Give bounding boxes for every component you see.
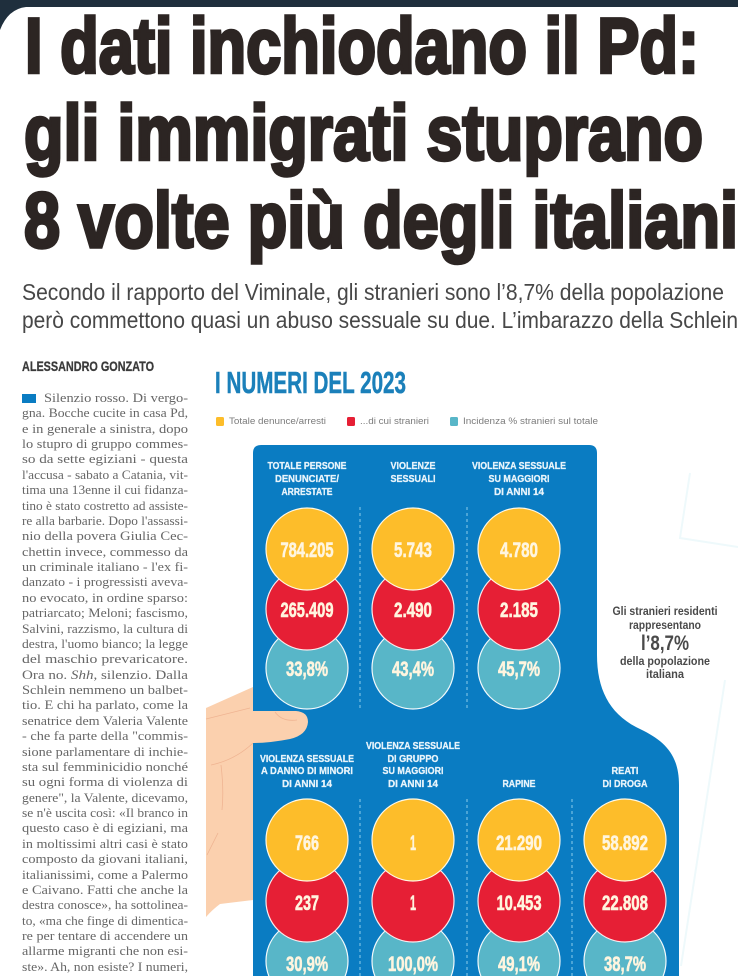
article text: Ora no. Shh , silenzio. Dalla xyxy=(22,668,189,682)
callout: stranieri residenti: italiana xyxy=(646,669,685,681)
column: reati di droga xyxy=(584,766,666,976)
column: totale persone: TOTALE PERSONE xyxy=(268,461,347,472)
article text: composto da giovani italiani, xyxy=(22,852,188,866)
article text: Silenzio rosso. Di vergo- xyxy=(44,391,188,405)
column: violenze sessuali: VIOLENZE xyxy=(390,461,436,472)
article text: su ogni forma di violenza di xyxy=(22,775,189,789)
column: totale persone xyxy=(266,461,348,709)
column: violenze sessuali: SESSUALI xyxy=(390,474,436,485)
article text: patriarcato; Meloni; fascismo, xyxy=(22,606,188,620)
article text: - che fa parte della "commis- xyxy=(22,729,188,743)
article text: del maschio prevaricatore. xyxy=(22,652,188,666)
column dividers xyxy=(360,507,572,976)
article text: re per tentare di accendere un xyxy=(22,929,188,943)
article text: Salvini, razzismo, la cultura di xyxy=(22,622,189,636)
article text: lo stupro di gruppo commes- xyxy=(22,437,188,451)
article text: se n'è uscita così: «Il branco in xyxy=(22,806,188,820)
article text: re alla barbarie. Dopo l'assassi- xyxy=(22,514,188,528)
column: violenza sessuale a danno di minori: DI ANNI 14 xyxy=(282,779,332,790)
column: rapine: RAPINE xyxy=(502,779,536,790)
article text: Schlein nemmeno un balbet- xyxy=(22,683,188,697)
column: violenze sessuali: 5.743 xyxy=(394,539,432,562)
column: violenza sessuale a danno di minori: 30,9% xyxy=(286,953,328,976)
column: rapine xyxy=(478,779,560,976)
column: violenza sessuale a danno di minori: 766 xyxy=(295,832,319,855)
article text: gna. Bocche cucite in casa Pd, xyxy=(22,406,188,420)
callout: stranieri residenti: Gli stranieri residenti xyxy=(612,606,718,618)
column: reati di droga: 58.892 xyxy=(602,832,648,855)
column: violenza sessuale su maggiori: DI ANNI 14 xyxy=(494,487,544,498)
column: violenza sessuale di gruppo: DI GRUPPO xyxy=(388,754,439,765)
legend: Totale denunce/arresti xyxy=(229,416,326,426)
column: violenza sessuale di gruppo xyxy=(366,741,460,976)
column: rapine: 49,1% xyxy=(498,953,540,976)
article text: chettin invece, commesso da xyxy=(22,545,189,559)
article text: ste». Ah, non esiste? I numeri, xyxy=(22,960,188,974)
article text: l'accusa - sabato a Catania, vit- xyxy=(22,468,188,482)
article text: un criminale italiano - l'ex fi- xyxy=(22,560,188,574)
article text: no evocato, in ordine sparso: xyxy=(22,591,188,605)
column: violenza sessuale a danno di minori: VIOLENZA SESSUALE xyxy=(260,754,354,765)
callout: stranieri residenti: rappresentano xyxy=(629,620,701,632)
column: violenza sessuale su maggiori: SU MAGGIORI xyxy=(488,474,550,485)
column: violenza sessuale su maggiori xyxy=(472,461,566,709)
column: violenza sessuale di gruppo: VIOLENZA SESSUALE xyxy=(366,741,460,752)
column: totale persone: ARRESTATE xyxy=(282,487,333,498)
column: violenza sessuale a danno di minori: 237 xyxy=(295,892,319,915)
column: violenza sessuale su maggiori: 45,7% xyxy=(498,658,540,681)
article text: genere", la Valente, dicevamo, xyxy=(22,791,188,805)
article text: e in generale a sinistra, dopo xyxy=(22,422,188,436)
callout: stranieri residenti xyxy=(612,606,718,681)
column: violenza sessuale su maggiori: 4.780 xyxy=(500,539,538,562)
panel: blue clipboard xyxy=(253,445,679,976)
article text: e Caivano. Fatti che anche la xyxy=(22,883,189,897)
column: violenze sessuali: 43,4% xyxy=(392,658,434,681)
chart heading: I NUMERI DEL 2023 xyxy=(215,365,406,400)
legend xyxy=(216,416,598,426)
icon: thumb xyxy=(206,708,308,855)
column: reati di droga: 22.808 xyxy=(602,892,648,915)
column: totale persone: 33,8% xyxy=(286,658,328,681)
byline: ALESSANDRO GONZATO xyxy=(22,358,154,374)
article text: tio. E chi ha parlato, come la xyxy=(22,698,189,712)
column: totale persone: 784.205 xyxy=(280,539,334,562)
article text xyxy=(22,391,189,974)
column: totale persone: DENUNCIATE/ xyxy=(275,474,339,485)
column: reati di droga: REATI xyxy=(612,766,639,777)
column: violenza sessuale di gruppo: 1 xyxy=(410,892,416,915)
article text: danzato - i progressisti aveva- xyxy=(22,575,188,589)
column: violenza sessuale a danno di minori xyxy=(260,754,354,976)
column: rapine: 10.453 xyxy=(496,892,542,915)
callout: stranieri residenti: l’8,7% xyxy=(641,632,689,655)
article text: sione parlamentare di inchie- xyxy=(22,745,188,759)
article text: destra, l'uomo bianco; la legge xyxy=(22,637,188,651)
column: violenza sessuale su maggiori: VIOLENZA SESSUALE xyxy=(472,461,566,472)
article text: senatrice dem Valeria Valente xyxy=(22,714,188,728)
article text: questo caso è di egiziani, ma xyxy=(22,821,189,835)
column: violenza sessuale di gruppo: SU MAGGIORI xyxy=(382,766,444,777)
article text: nio della povera Giulia Cec- xyxy=(22,529,188,543)
article text: sta sul femminicidio nonché xyxy=(22,760,188,774)
article text: tima una 13enne il cui fidanza- xyxy=(22,483,188,497)
column: violenza sessuale di gruppo: DI ANNI 14 xyxy=(388,779,438,790)
article text: tino è stato costretto ad assiste- xyxy=(22,499,188,513)
article text: so da sette egiziani - questa xyxy=(22,452,189,466)
title xyxy=(24,2,738,264)
column: reati di droga: DI DROGA xyxy=(602,779,648,790)
column: violenze sessuali: 2.490 xyxy=(394,599,432,622)
article text: to, «ma che finge di dimentica- xyxy=(22,914,188,928)
icon: hand behind panel xyxy=(206,687,253,917)
column: totale persone: 265.409 xyxy=(280,599,334,622)
column: violenza sessuale di gruppo: 100,0% xyxy=(388,953,438,976)
callout: stranieri residenti: della popolazione xyxy=(620,656,710,668)
column: reati di droga: 38,7% xyxy=(604,953,646,976)
column: violenza sessuale a danno di minori: A DANNO DI MINORI xyxy=(261,766,353,777)
column: violenze sessuali xyxy=(372,461,454,709)
article text: allarme migranti che non esi- xyxy=(22,944,188,958)
subtitle xyxy=(22,279,738,333)
legend: ...di cui stranieri xyxy=(360,416,429,426)
legend: Incidenza % stranieri sul totale xyxy=(463,416,598,426)
column: violenza sessuale di gruppo: 1 xyxy=(410,832,416,855)
article text: italianissimi, come a Palermo xyxy=(22,868,188,882)
column: rapine: 21.290 xyxy=(496,832,542,855)
column: violenza sessuale su maggiori: 2.185 xyxy=(500,599,538,622)
article text: in moltissimi altri casi è stato xyxy=(22,837,188,851)
article text: destra conosce», ha sottolinea- xyxy=(22,898,188,912)
